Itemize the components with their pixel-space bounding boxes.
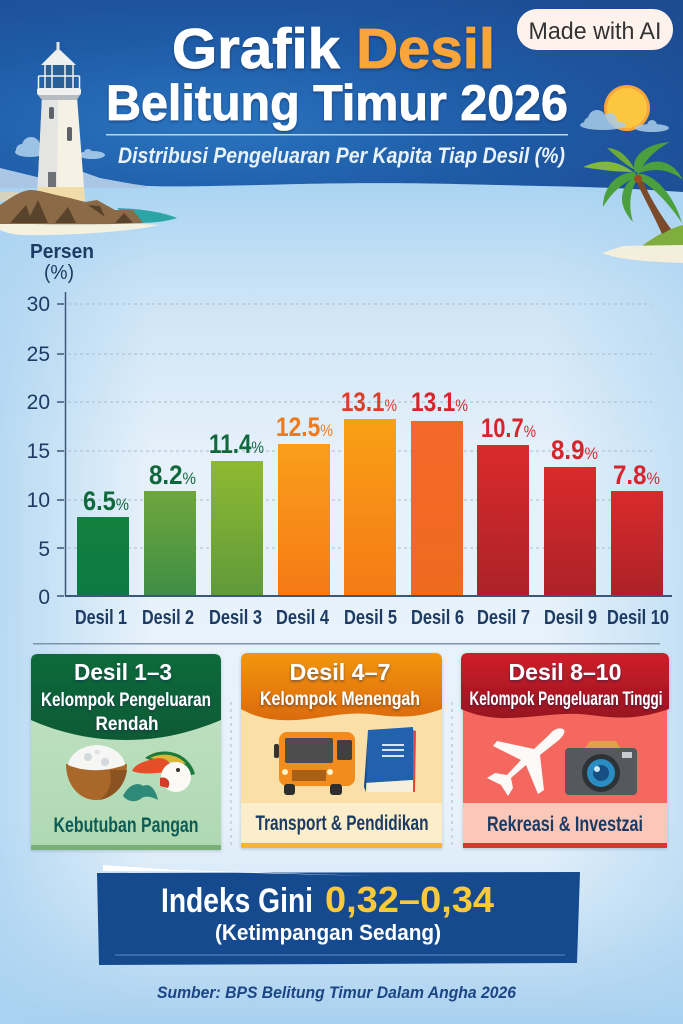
subtitle: Distribusi Pengeluaran Per Kapita Tiap Desil (%): [118, 143, 565, 168]
heading: desil 4-7: [260, 659, 420, 710]
y axis with ticks: [27, 292, 66, 609]
category labels: Desil 10: [607, 607, 669, 629]
y axis with ticks: 20: [27, 391, 50, 414]
label: kebutuhan pangan: Kebutuban Pangan: [54, 814, 198, 837]
y axis with ticks: 0: [38, 586, 50, 609]
category labels: Desil 1: [75, 607, 127, 629]
value labels: 8.9%: [551, 435, 598, 465]
panel: desil 1-3: [31, 654, 221, 850]
icon: airplane: [487, 728, 564, 796]
icon: bus: [274, 732, 355, 795]
category labels: Desil 9: [544, 607, 597, 629]
y axis title: Persen: [30, 241, 94, 263]
title: [106, 17, 568, 131]
category labels: Desil 4: [276, 607, 330, 629]
icon: rice bowl, chicken and greens: [66, 745, 195, 801]
value labels: 7.8%: [613, 460, 660, 490]
value labels: 13.1%: [341, 387, 397, 417]
heading: desil 8-10: [470, 659, 662, 710]
heading: desil 1-3: [41, 659, 211, 735]
badge: made with AI: [517, 9, 673, 50]
heading: desil 4-7: Kelompok Menengah: [260, 689, 420, 710]
value labels: 12.5%: [276, 412, 333, 442]
title: Grafik Desil: [172, 17, 495, 81]
category labels: Desil 5: [344, 607, 397, 629]
category labels: [75, 607, 669, 629]
callout: indeks gini: [97, 865, 580, 965]
y axis with ticks: 30: [27, 293, 50, 316]
title underline: [106, 134, 568, 136]
icon: palm island: [583, 142, 683, 263]
gini label: Indeks Gini: [161, 882, 313, 920]
bars: [77, 419, 663, 595]
y axis title: [30, 241, 94, 284]
panel: desil 4-7: [241, 653, 442, 848]
heading: desil 4-7: Desil 4–7: [290, 659, 390, 685]
value labels: 6.5%: [83, 486, 129, 516]
icon: lighthouse: [37, 42, 85, 201]
value labels: [83, 387, 660, 516]
heading: desil 8-10: Desil 8–10: [508, 659, 622, 685]
icon: rock island: [0, 190, 177, 235]
panel: desil 8-10: [461, 653, 669, 848]
y axis with ticks: 15: [27, 440, 50, 463]
value labels: 8.2%: [149, 460, 196, 490]
icon: book: [364, 727, 416, 792]
value labels: 13.1%: [411, 387, 468, 417]
icon: sun and clouds: [580, 85, 669, 132]
category labels: Desil 3: [209, 607, 262, 629]
heading: desil 1-3: Kelompok Pengeluaran: [41, 690, 211, 711]
source: Sumber: BPS Belitung Timur Dalam Angha 2026: [157, 983, 516, 1002]
y axis with ticks: 5: [38, 538, 50, 561]
y axis with ticks: 10: [27, 489, 50, 512]
bar chart: [27, 292, 672, 629]
category labels: Desil 6: [411, 607, 464, 629]
icon: left hills and clouds: [0, 137, 147, 201]
badge: made with AI: Made with AI: [528, 18, 662, 45]
y axis with ticks: 25: [27, 343, 50, 366]
value labels: 10.7%: [481, 413, 536, 443]
header banner: [0, 0, 683, 192]
gini note: (Ketimpangan Sedang): [215, 920, 441, 945]
heading: desil 1-3: Rendah: [96, 714, 158, 735]
icon: camera: [565, 741, 637, 795]
y axis title: (%): [44, 262, 74, 284]
title: Belitung Timur 2026: [106, 75, 568, 131]
value labels: 11.4%: [209, 429, 264, 459]
category labels: Desil 7: [477, 607, 530, 629]
label: transport dan pendidikan: Transport & Pendidikan: [256, 812, 428, 835]
gini value: 0,32–0,34: [325, 879, 494, 920]
heading: desil 1-3: Desil 1–3: [74, 659, 172, 685]
category labels: Desil 2: [142, 607, 194, 629]
